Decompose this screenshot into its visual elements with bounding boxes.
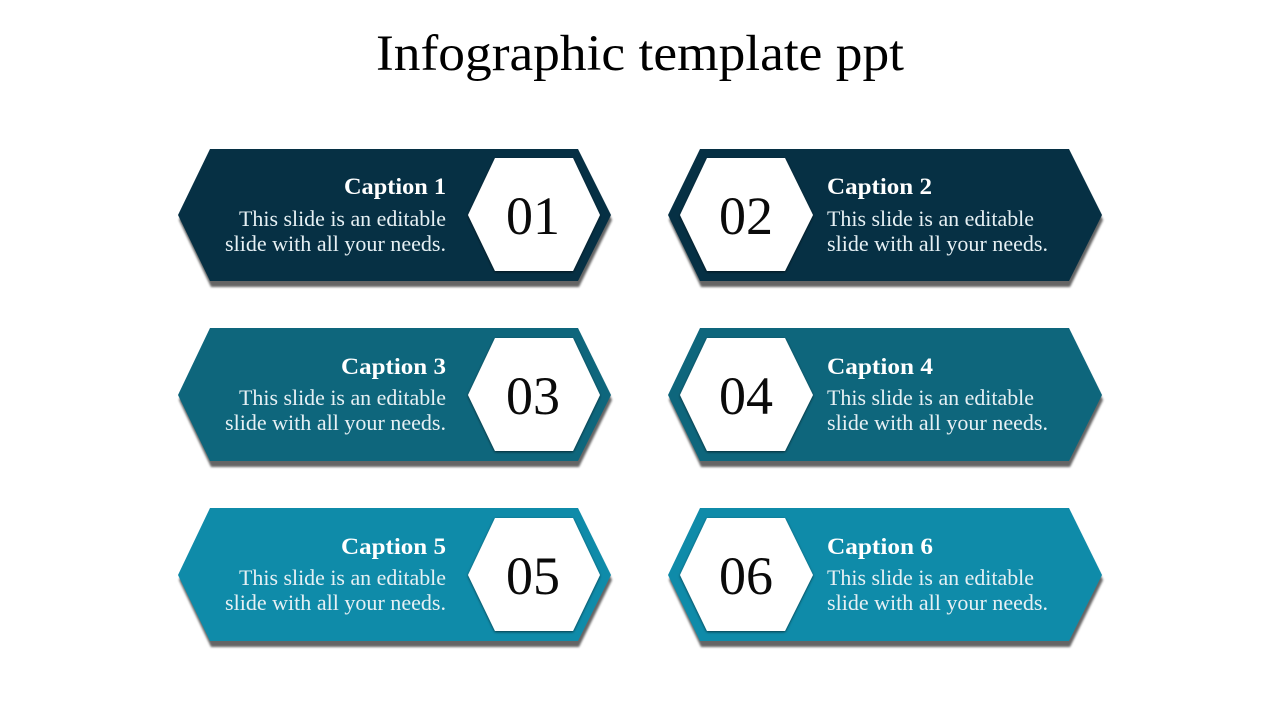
text: caption 6: This slide is an editable [827, 565, 1034, 590]
icon: hexagon 03: 03 [506, 366, 560, 426]
text: caption 5: This slide is an editable [239, 565, 446, 590]
text: caption 1 [225, 174, 446, 256]
panel: caption 2 [668, 149, 1103, 287]
text: caption 2: slide with all your needs. [827, 231, 1048, 256]
icon: hexagon 04: 04 [719, 366, 773, 426]
text: caption 1: This slide is an editable [239, 206, 446, 231]
text: caption 2: Caption 2 [827, 174, 932, 199]
icon: hexagon 06 [680, 518, 813, 631]
text: caption 4 [827, 354, 1048, 435]
icon: hexagon 02: 02 [719, 186, 773, 246]
text: caption 2: This slide is an editable [827, 206, 1034, 231]
text: caption 3: This slide is an editable [239, 385, 446, 410]
text: caption 5 [225, 534, 446, 615]
text: caption 4: slide with all your needs. [827, 410, 1048, 435]
text: caption 6: slide with all your needs. [827, 590, 1048, 615]
panel: caption 6 [668, 508, 1103, 647]
icon: hexagon 05: 05 [506, 546, 560, 606]
text: caption 5: Caption 5 [341, 534, 446, 559]
panel: caption 4 [668, 328, 1103, 467]
text: caption 3 [225, 354, 446, 435]
panel: caption 5 [178, 508, 612, 647]
text: caption 1: Caption 1 [344, 174, 446, 199]
icon: hexagon 06: 06 [719, 546, 773, 606]
icon: hexagon 01 [468, 158, 600, 271]
icon: hexagon 01: 01 [506, 186, 560, 246]
title: Infographic template ppt [376, 26, 904, 82]
text: caption 3: Caption 3 [341, 354, 446, 379]
text: caption 6: Caption 6 [827, 534, 933, 559]
panel: caption 3 [178, 328, 612, 467]
text: caption 5: slide with all your needs. [225, 590, 446, 615]
text: caption 6 [827, 534, 1048, 615]
icon: hexagon 03 [468, 338, 600, 451]
text: caption 4: This slide is an editable [827, 385, 1034, 410]
icon: hexagon 05 [468, 518, 600, 631]
text: caption 1: slide with all your needs. [225, 231, 446, 256]
text: caption 4: Caption 4 [827, 354, 934, 379]
icon: hexagon 04 [680, 338, 813, 451]
text: caption 3: slide with all your needs. [225, 410, 446, 435]
icon: hexagon 02 [680, 158, 813, 271]
panel: caption 1 [178, 149, 612, 287]
text: caption 2 [827, 174, 1048, 256]
